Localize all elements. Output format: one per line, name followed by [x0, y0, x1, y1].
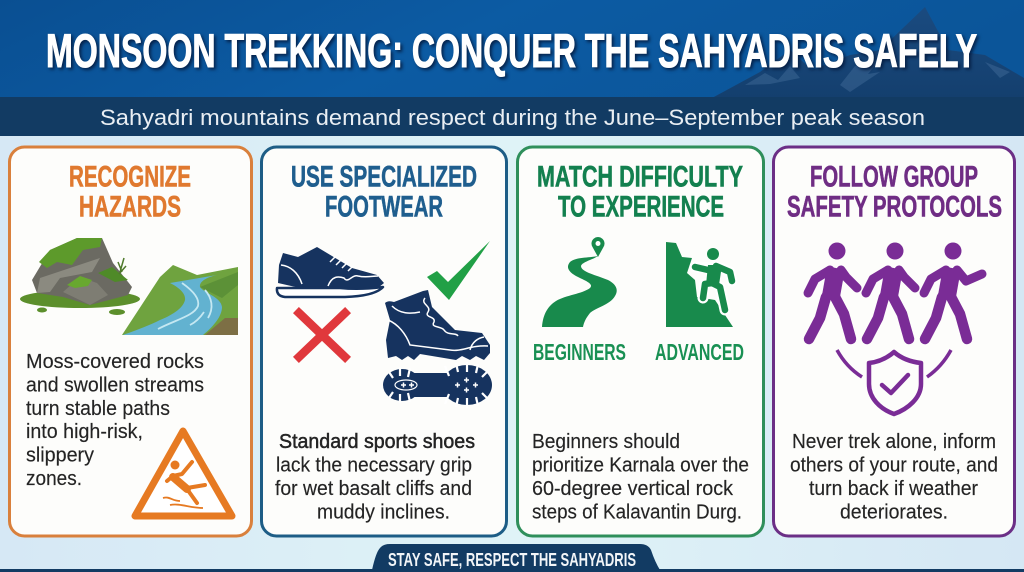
label: advanced: ADVANCED [655, 339, 744, 365]
heading: specialized footwear: FOOTWEAR [325, 190, 443, 224]
panel: match difficulty [518, 147, 764, 536]
heading: match difficulty: TO EXPERIENCE [558, 190, 724, 224]
text: hazards body: zones. [26, 467, 82, 490]
icon: safety shield with check [837, 350, 951, 414]
text: group safety body: others of your route, and [790, 454, 998, 476]
heading: group safety [787, 160, 1002, 224]
text: footwear body: muddy inclines. [317, 500, 450, 524]
icon: swollen stream [122, 265, 238, 335]
text: footwear body: for wet basalt cliffs and [275, 477, 472, 500]
panel: specialized footwear [262, 147, 506, 536]
heading: specialized footwear [291, 160, 477, 224]
icon: slippery warning sign [135, 431, 232, 516]
heading: recognize hazards: RECOGNIZE [69, 160, 191, 194]
icon: mossy rock [20, 238, 140, 315]
icon: mountain range [712, 7, 1024, 98]
text: footwear body: Standard sports shoes [279, 430, 475, 453]
icon: sports shoe [277, 247, 384, 297]
text: hazards body: Moss-covered rocks [26, 350, 204, 373]
icon: three walking hikers [808, 242, 982, 339]
page background [0, 136, 1024, 572]
icon: boot tread sole [383, 362, 492, 408]
panel: recognize hazards [10, 147, 252, 536]
icon: green check [427, 241, 490, 300]
text: difficulty body: prioritize Karnala over the [532, 454, 749, 476]
text: footwear body: lack the necessary grip [276, 454, 472, 476]
icon: red cross [299, 313, 345, 357]
text: difficulty body [532, 430, 749, 524]
footer text: STAY SAFE, RESPECT THE SAHYADRIS [388, 550, 636, 570]
heading: match difficulty: MATCH DIFFICULTY [537, 160, 743, 194]
text: difficulty body: 60-degree vertical rock [532, 477, 734, 500]
text: group safety body: deteriorates. [840, 500, 948, 524]
heading: match difficulty [537, 160, 743, 224]
panel: group safety [774, 147, 1014, 536]
text: difficulty body: steps of Kalavantin Durg. [532, 500, 742, 524]
footer banner [0, 544, 1024, 572]
text: hazards body [26, 350, 204, 490]
text: hazards body: turn stable paths [26, 397, 170, 420]
heading: recognize hazards [69, 160, 191, 224]
text: footwear body [275, 430, 475, 524]
icon: winding trail with pin [542, 237, 617, 327]
text: group safety body [790, 430, 998, 524]
label: beginners: BEGINNERS [533, 339, 626, 365]
icon: hiking boot [385, 290, 490, 360]
text: group safety body: Never trek alone, inform [792, 430, 996, 453]
subtitle: Sahyadri mountains demand respect during the June–September peak season [100, 105, 925, 130]
text: difficulty body: Beginners should [532, 430, 680, 453]
text: hazards body: into high-risk, [26, 420, 143, 443]
header banner [0, 0, 1024, 98]
icon: cliff climber [666, 242, 733, 327]
heading: specialized footwear: USE SPECIALIZED [291, 160, 477, 194]
text: group safety body: turn back if weather [809, 477, 978, 500]
subtitle bar [0, 97, 1024, 136]
text: hazards body: slippery [26, 444, 95, 466]
text: hazards body: and swollen streams [26, 374, 204, 396]
heading: recognize hazards: HAZARDS [79, 190, 181, 224]
